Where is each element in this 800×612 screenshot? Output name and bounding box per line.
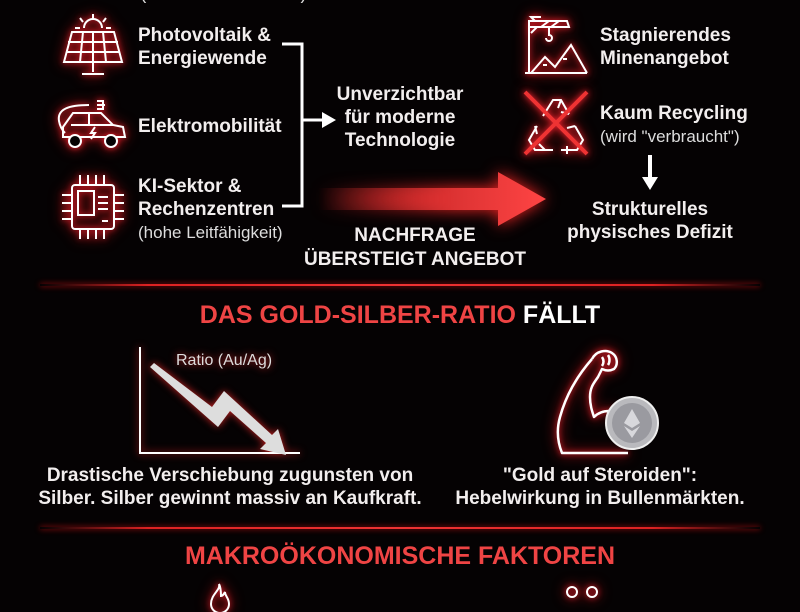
text: KI-Sektor: (hohe Leitfähigkeit) xyxy=(138,223,283,242)
text: gold auf steroiden: Hebelwirkung in Bullenmärkten. xyxy=(455,488,745,509)
icon: people (partial) xyxy=(558,578,606,606)
icon: solar panel xyxy=(55,8,131,84)
icon: recycling crossed xyxy=(517,84,595,162)
icon: flame (partial) xyxy=(202,578,238,612)
text: KI-Sektor: Rechenzentren xyxy=(138,199,274,220)
chart: ratio falling xyxy=(133,344,303,460)
text: Nachfrage: NACHFRAGE xyxy=(354,225,476,246)
big red arrow xyxy=(320,164,553,234)
text: Unverzichtbar: Unverzichtbar xyxy=(337,84,463,105)
icon: chip xyxy=(55,168,131,246)
text: Photovoltaik: Photovoltaik & xyxy=(138,25,271,46)
icon: muscle + coin xyxy=(547,340,659,464)
text: Defizit: Strukturelles xyxy=(592,199,708,220)
text: Defizit xyxy=(567,199,733,243)
arrow down xyxy=(642,155,658,190)
text: Defizit: physisches Defizit xyxy=(567,222,733,243)
text: Photovoltaik: Energiewende xyxy=(138,48,267,69)
text: KI-Sektor: KI-Sektor & xyxy=(138,176,241,197)
text: Unverzichtbar: für moderne xyxy=(345,107,455,128)
text: drastische xyxy=(38,465,422,509)
text: KI-Sektor xyxy=(138,176,283,242)
text: drastische: Drastische Verschiebung zugunsten von xyxy=(47,465,413,486)
text: Nachfrage: ÜBERSTEIGT ANGEBOT xyxy=(304,249,526,270)
icon: electric car xyxy=(49,92,134,157)
text: Minenangebot: Minenangebot xyxy=(600,48,729,69)
heading: makro: MAKROÖKONOMISCHE FAKTOREN xyxy=(185,542,615,570)
text: Elektromobilität: Elektromobilität xyxy=(138,116,282,137)
text: Photovoltaik xyxy=(138,25,271,69)
text: Minenangebot xyxy=(600,25,731,69)
text: Unverzichtbar: Technologie xyxy=(345,130,455,151)
heading: gold-silber-ratio: DAS GOLD-SILBER-RATIO FÄLLT xyxy=(200,301,600,329)
text: Minenangebot: Stagnierendes xyxy=(600,25,731,46)
icon: mine xyxy=(518,7,594,84)
text: Unverzichtbar xyxy=(337,84,464,151)
text: gold auf steroiden: "Gold auf Steroiden": xyxy=(503,465,697,486)
text: Kaum Recycling: Kaum Recycling xyxy=(600,103,748,124)
text: Nachfrage xyxy=(304,225,526,270)
text: gold auf steroiden xyxy=(455,465,745,509)
bracket arrow xyxy=(282,42,336,208)
chart: ratio falling: Ratio (Au/Ag) xyxy=(176,352,272,369)
text: drastische: Silber. Silber gewinnt massiv an Kaufkraft. xyxy=(38,488,422,509)
text: Kaum Recycling: (wird "verbraucht") xyxy=(600,127,740,146)
text: Kaum Recycling xyxy=(600,103,748,146)
